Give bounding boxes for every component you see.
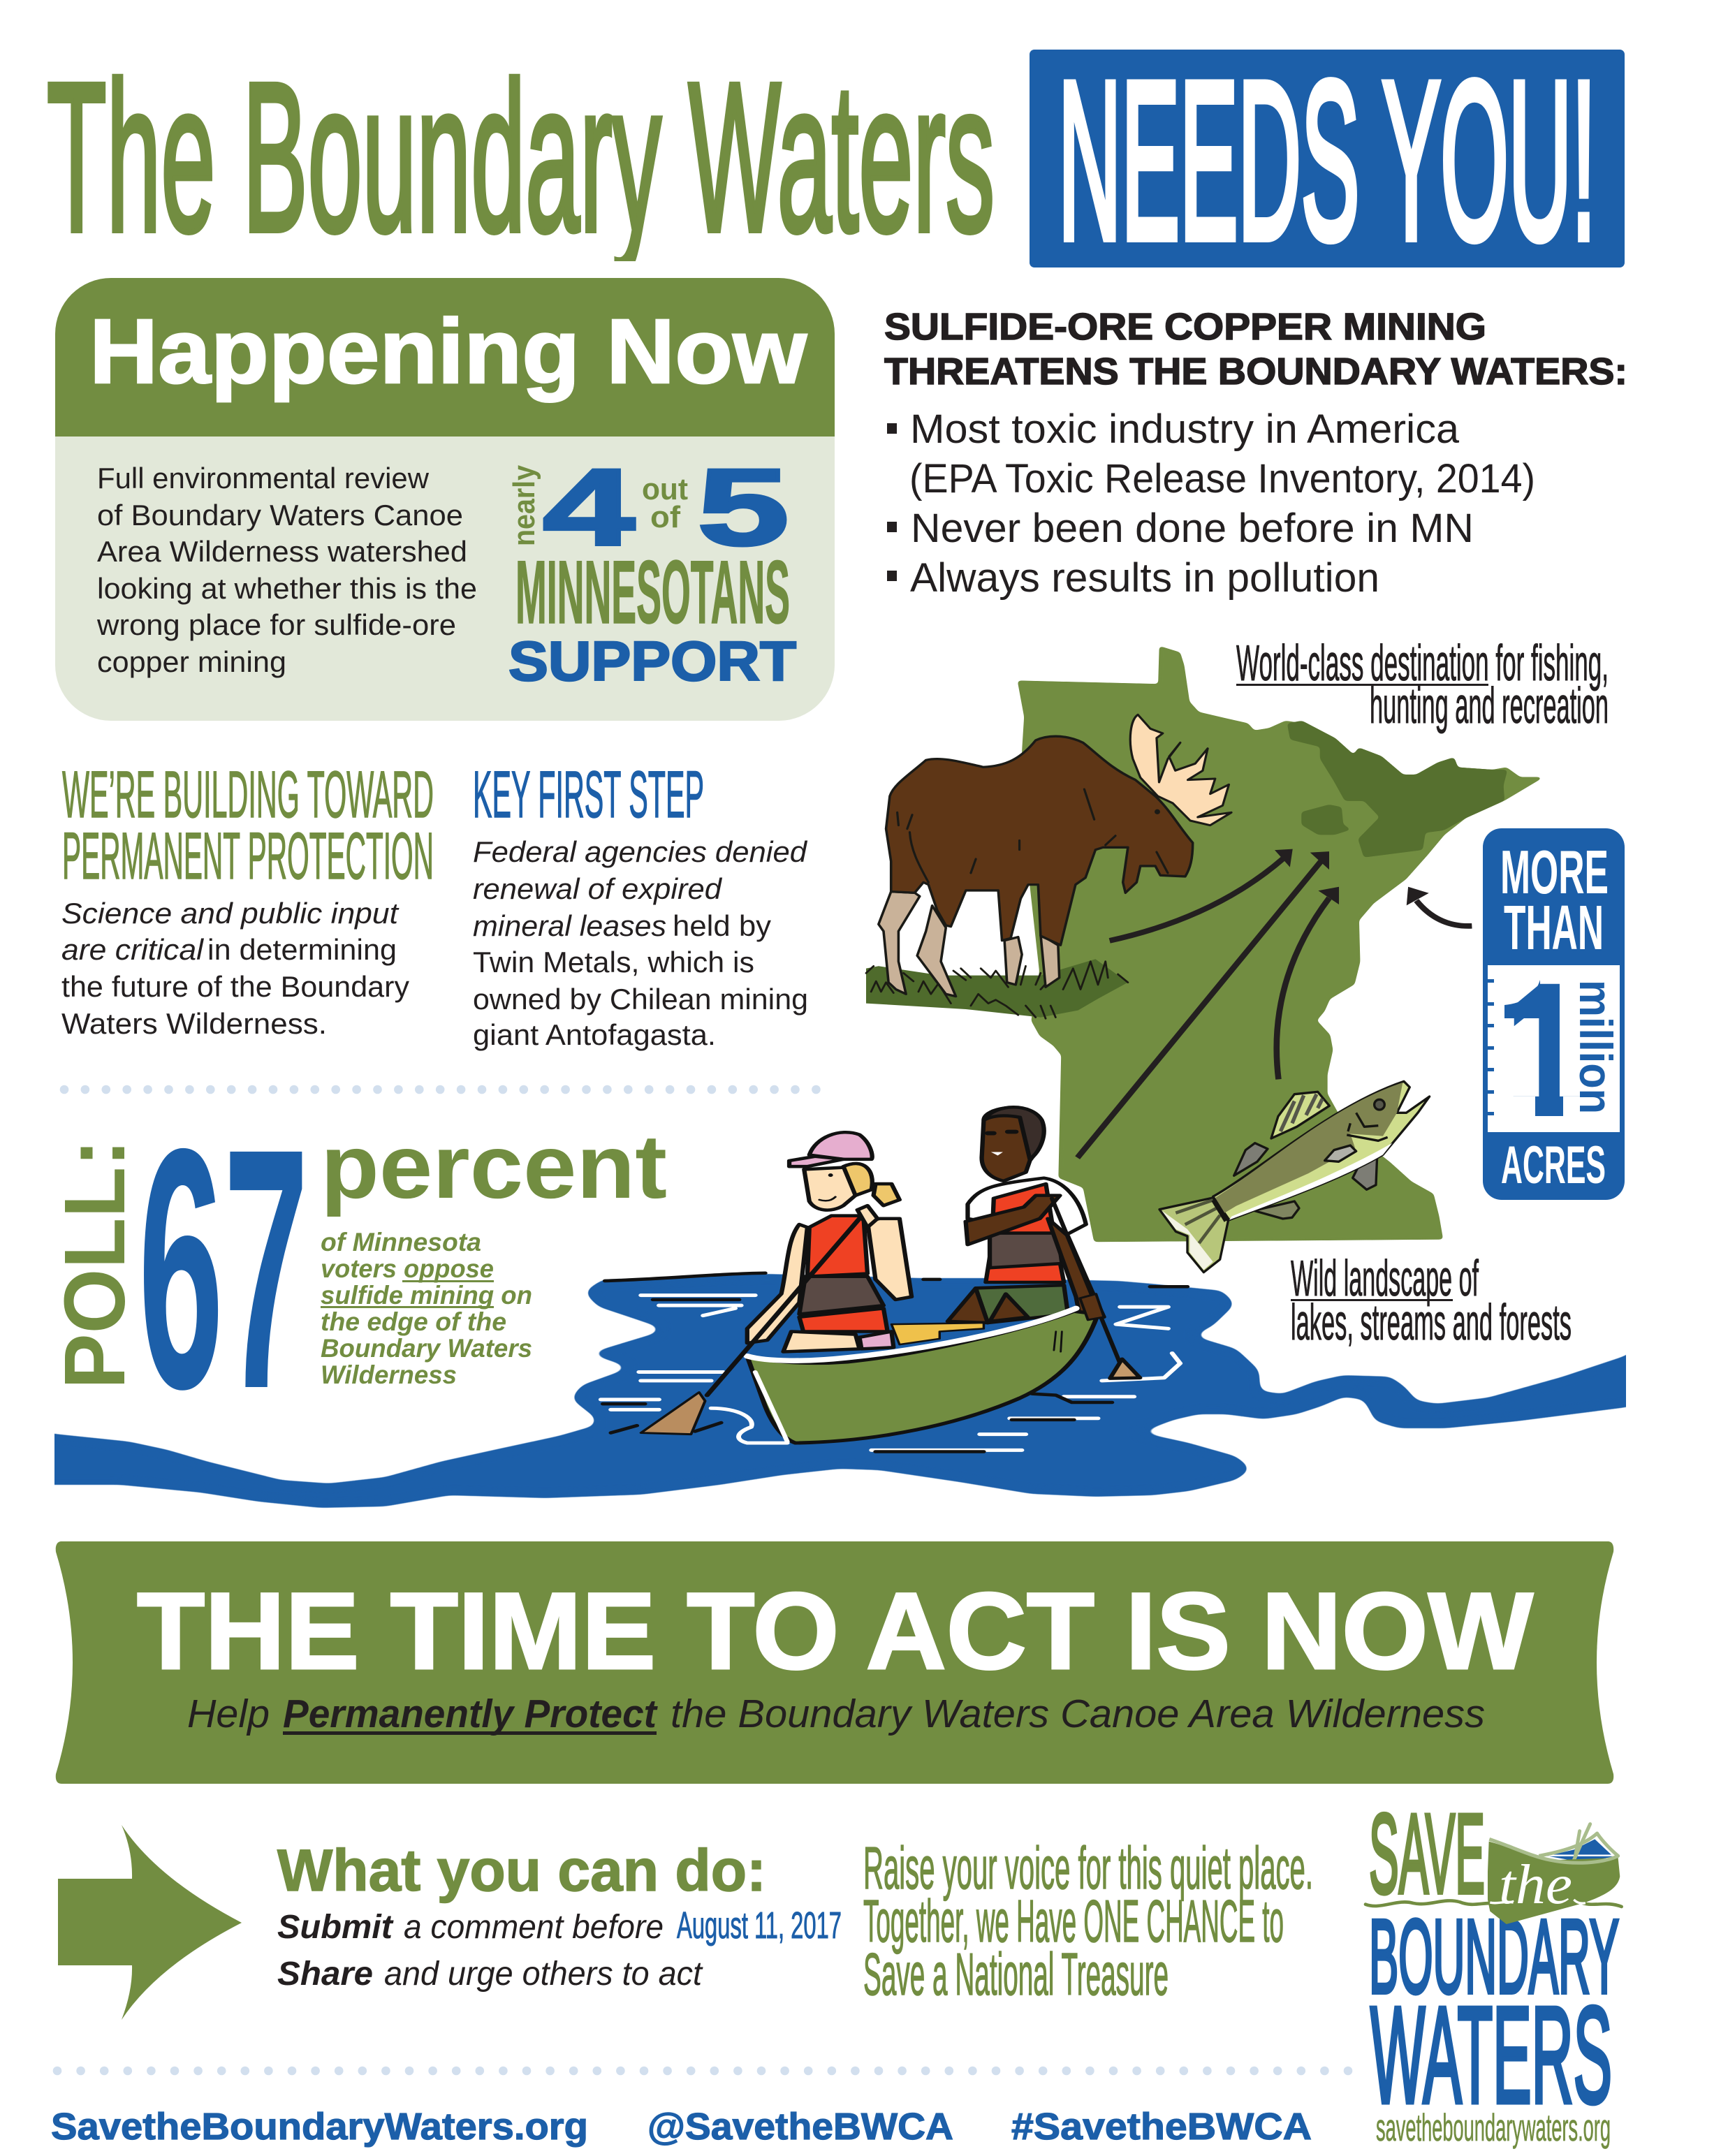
- stat: poll 67 percent: [47, 1077, 667, 1460]
- heading: happening now: Happening Now: [89, 300, 807, 402]
- stat: more than 1 million acres: ACRES: [1501, 1136, 1606, 1195]
- paddle right: [1052, 1198, 1140, 1379]
- text block: environmental review: of Boundary Waters Canoe: [97, 499, 463, 531]
- text block: raise your voice: Save a National Treasure: [863, 1942, 1169, 2008]
- fins: [1271, 1092, 1329, 1138]
- text block: environmental review: Full environmental review: [97, 462, 430, 494]
- text: WE’RE BUILDING TOWARD: [62, 758, 434, 832]
- paragraph: federal agencies: Twin Metals, which is: [473, 946, 754, 978]
- stat: more than 1 million acres: 1: [1504, 943, 1588, 1157]
- footer links: #SavetheBWCA: [1011, 2106, 1312, 2148]
- map: minnesota: [1018, 647, 1541, 1241]
- text block: poll detail: voters oppose: [321, 1254, 494, 1283]
- text block: environmental review: looking at whether this is the: [97, 572, 477, 605]
- stat: 4 out of 5 minnesotans support: of: [650, 500, 680, 534]
- paddler: man: [948, 1107, 1104, 1323]
- paddler: woman: [747, 1132, 911, 1351]
- heading: building toward permanent protection: [62, 758, 434, 893]
- action: submit: August 11, 2017: [677, 1905, 842, 1946]
- moose body: [886, 736, 1193, 945]
- illustration: fish: [1159, 1081, 1430, 1273]
- bullet list: [887, 406, 1535, 601]
- text block: poll detail: the edge of the: [321, 1307, 506, 1336]
- paragraph: science and public input: are critical: [61, 933, 205, 966]
- water ripples: [601, 1273, 1187, 1451]
- paddle left: [641, 1219, 859, 1435]
- stat: 4 out of 5 minnesotans support: 5: [697, 447, 789, 569]
- stat: 4 out of 5 minnesotans support: nearly: [507, 465, 541, 546]
- stat: poll 67 percent: 67: [138, 1077, 309, 1460]
- stat: 4 out of 5 minnesotans support: 4: [543, 447, 635, 569]
- text block: permanent protection: [61, 758, 434, 1040]
- text block: key first step: KEY FIRST STEP: [473, 758, 704, 832]
- illustration: canoe with two paddlers: [601, 1107, 1187, 1451]
- canoe hull: [747, 1311, 1098, 1443]
- heading: What you can do:: [277, 1838, 766, 1903]
- stat: 4 out of 5 minnesotans support: out: [642, 472, 688, 506]
- moose markings: [898, 789, 1168, 882]
- text block: key first step: [473, 758, 808, 1051]
- paragraph: federal agencies: Federal agencies denied: [473, 835, 808, 868]
- heading: sulfide-ore threats: THREATENS THE BOUNDARY WATERS:: [884, 351, 1627, 393]
- stat: poll 67 percent: POLL:: [47, 1139, 143, 1389]
- grass: [866, 959, 1128, 1018]
- paragraph: science and public input: Science and public input: [61, 897, 400, 930]
- text block: environmental review: wrong place for sulfide-ore: [96, 608, 456, 641]
- caption: world-class destination: [1236, 636, 1609, 734]
- paragraph: science and public input: in determining: [207, 933, 397, 966]
- text block: poll detail: of Minnesota: [321, 1228, 481, 1256]
- paragraph: federal agencies: mineral leases: [473, 909, 666, 942]
- footer links: @SavetheBWCA: [647, 2106, 953, 2148]
- paragraph: federal agencies: giant Antofagasta.: [473, 1018, 716, 1051]
- action: share: and urge others to act: [384, 1956, 703, 1993]
- logo: save the boundary waters: SAVE: [1369, 1791, 1485, 1917]
- paragraph: federal agencies: owned by Chilean mining: [473, 983, 808, 1015]
- action: submit: [277, 1905, 842, 1946]
- tagline: Permanently Protect: [283, 1692, 658, 1736]
- action: submit: a comment before: [404, 1909, 664, 1946]
- paragraph: science and public input: the future of the Boundary: [61, 970, 409, 1003]
- bullet list: Never been done before in MN: [911, 506, 1474, 551]
- logo canoe: [1365, 1824, 1622, 1924]
- tagline: the Boundary Waters Canoe Area Wilderness: [671, 1692, 1485, 1736]
- text block: raise your voice: [863, 1835, 1313, 2008]
- heading: sulfide-ore threats: SULFIDE-ORE COPPER MINING: [884, 306, 1486, 348]
- water: [14, 1275, 1676, 1506]
- stat: more than 1 million acres: million: [1570, 980, 1622, 1114]
- illustration: moose: [866, 714, 1231, 1018]
- gunwale: [747, 1308, 1076, 1361]
- bullet list: (EPA Toxic Release Inventory, 2014): [909, 456, 1535, 501]
- text block: threats: [884, 306, 1627, 601]
- seat: [891, 1323, 983, 1344]
- text: MINNESOTANS: [515, 543, 790, 643]
- text: PERMANENT PROTECTION: [62, 819, 434, 893]
- moose eye: [1155, 809, 1160, 814]
- banner: the time to act is now: THE TIME TO ACT IS NOW: [137, 1571, 1534, 1692]
- logo: save the boundary waters: [1365, 1791, 1622, 2149]
- paragraph: federal agencies: held by: [673, 909, 771, 942]
- text block: poll detail: [321, 1228, 532, 1389]
- gill, eye, pectoral fin: [1347, 1113, 1388, 1141]
- arrows to map: [1078, 849, 1472, 1158]
- paragraph: science and public input: Waters Wilderness.: [61, 1007, 327, 1040]
- paragraph: federal agencies: [473, 835, 808, 1051]
- text block: poll detail: Wilderness: [321, 1361, 457, 1389]
- logo: save the boundary waters: the: [1499, 1854, 1572, 1916]
- arrow: what you can do: [58, 1825, 242, 2020]
- man's hand: [1080, 1294, 1104, 1320]
- stat: more than 1 million acres: MORE: [1500, 837, 1609, 907]
- moose legs: [879, 892, 1060, 997]
- banner: the time to act is now: [56, 1541, 1613, 1784]
- text block: environmental review: [96, 462, 477, 678]
- antlers: [1130, 714, 1231, 826]
- caption: wild landscape: [1291, 1251, 1572, 1351]
- bullet list: Always results in pollution: [910, 555, 1379, 601]
- action: share: Share: [277, 1956, 373, 1993]
- panel: happening now: [55, 278, 835, 721]
- action: submit: Submit: [277, 1909, 394, 1946]
- stat: more than 1 million acres: [1483, 828, 1625, 1200]
- tagline: [187, 1692, 1485, 1736]
- stat: 4 out of 5 minnesotans support: SUPPORT: [508, 630, 796, 692]
- text block: environmental review: Area Wilderness watershed: [97, 535, 467, 568]
- tagline: Help: [187, 1692, 270, 1736]
- stat: 4 out of 5 minnesotans support: [507, 447, 796, 692]
- footer links: SavetheBoundaryWaters.org: [51, 2106, 588, 2148]
- paragraph: federal agencies: renewal of expired: [473, 872, 723, 905]
- text block: poll detail: sulfide mining on: [321, 1281, 532, 1310]
- stat: more than 1 million acres: THAN: [1504, 893, 1604, 963]
- footer links: [51, 2106, 1312, 2148]
- tail: [1159, 1198, 1228, 1273]
- text block: environmental review: copper mining: [97, 645, 286, 678]
- paragraph: science and public input: [61, 897, 409, 1040]
- heading: sulfide-ore threats: [884, 306, 1627, 393]
- stat: poll 67 percent: percent: [321, 1115, 667, 1217]
- text block: what you can do: [277, 1838, 842, 1993]
- body: [1213, 1081, 1430, 1220]
- caption: wild landscape: Wild landscape of: [1291, 1251, 1479, 1307]
- bullet list: Most toxic industry in America: [910, 406, 1460, 452]
- text block: poll detail: Boundary Waters: [321, 1334, 532, 1363]
